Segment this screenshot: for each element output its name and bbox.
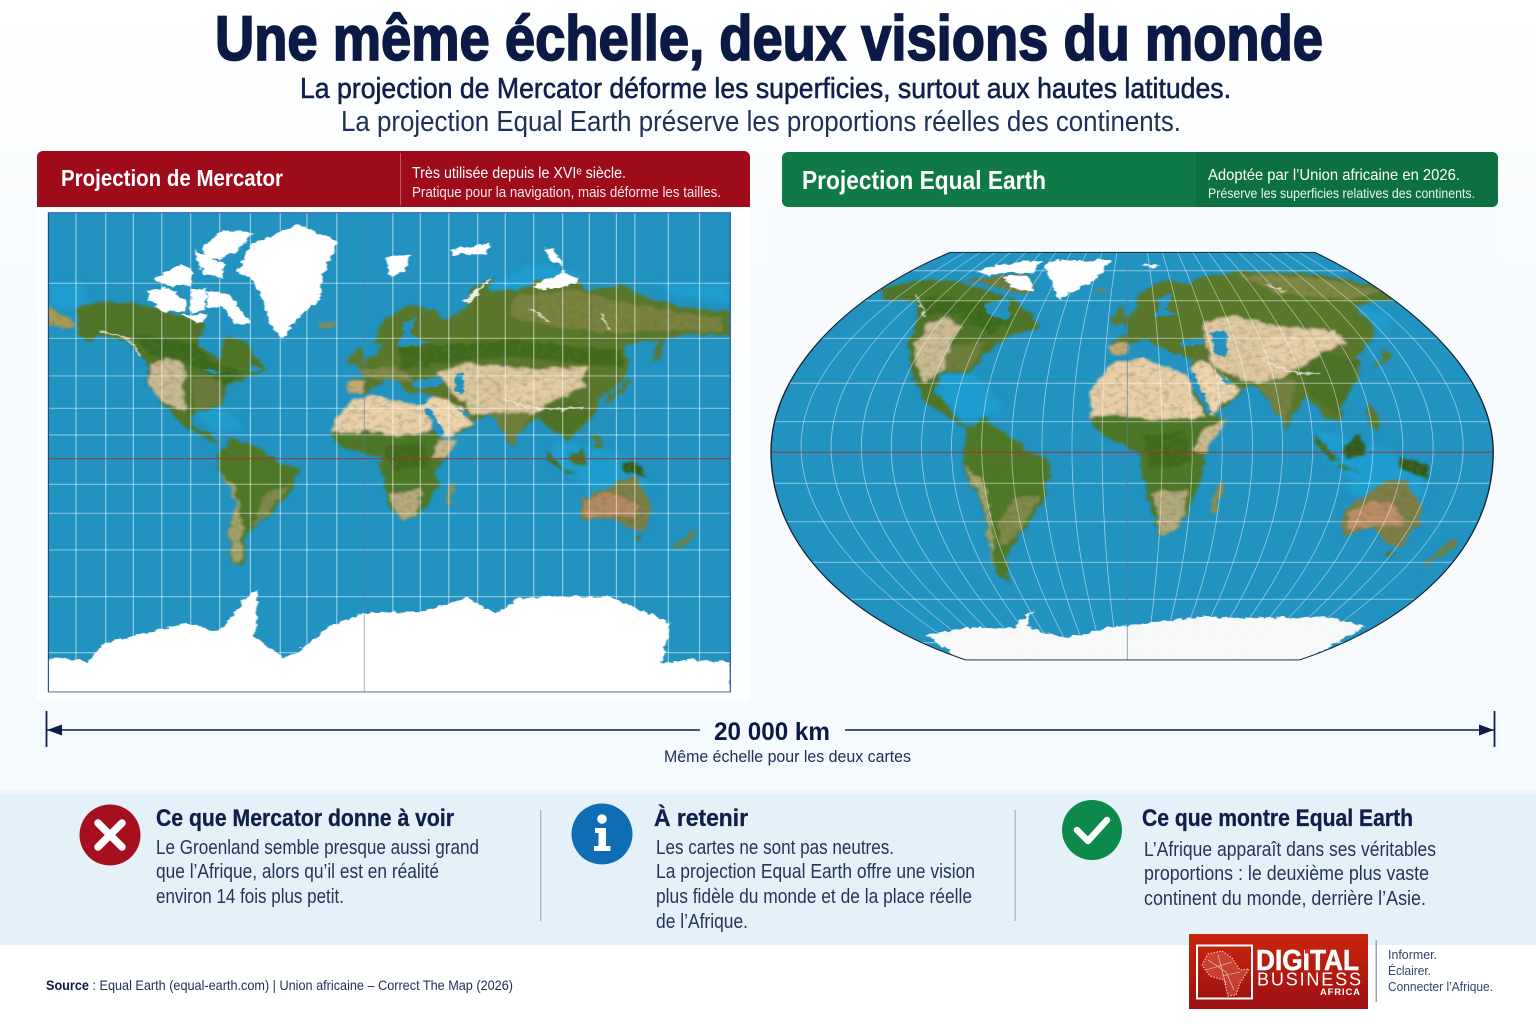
ice [925, 260, 1365, 663]
source: Source : Equal Earth (equal-earth.com) | Union africaine – Correct The Map (2026) [46, 977, 513, 993]
map: Equal Earth [760, 247, 1506, 667]
islands [1344, 432, 1365, 458]
takeaway: à retenir: La projection Equal Earth offre une vision [656, 861, 975, 883]
takeaway: Equal Earth: continent du monde, derrière l’Asie. [1144, 888, 1426, 910]
Australia [1341, 480, 1425, 547]
inland seas [198, 317, 471, 435]
header: Equal Earth: Projection Equal Earth [802, 165, 1046, 195]
panel: Mercator [37, 151, 750, 700]
takeaway: Equal Earth: Ce que montre Equal Earth [1142, 805, 1413, 832]
subtitle: La projection Equal Earth préserve les proportions réelles des continents. [341, 106, 1181, 138]
takeaway: Mercator: que l’Afrique, alors qu’il est en réalité [156, 861, 439, 883]
scale bar: Même échelle pour les deux cartes [664, 747, 911, 766]
inland seas [985, 293, 1234, 413]
title: Une même échelle, deux visions du monde [215, 4, 1323, 74]
header: Mercator: Projection de Mercator [61, 165, 283, 191]
ice: Greenland, Arctic, Antarctica [44, 225, 730, 697]
header: Equal Earth [782, 152, 1498, 207]
tagline: Éclairer. [1388, 963, 1431, 978]
North America [78, 302, 269, 445]
footer band [0, 945, 1536, 1024]
logo: Digital Business Africa: DIGITAL [1256, 945, 1359, 977]
graticule [760, 252, 1506, 660]
logo: Digital Business Africa: AFRICA [1320, 987, 1360, 998]
takeaway: Mercator [80, 804, 479, 908]
tagline: Informer. [1388, 947, 1437, 962]
icon: green check [1062, 800, 1122, 860]
tagline: Connecter l’Afrique. [1388, 979, 1493, 994]
header: Equal Earth: Préserve les superficies relatives des continents. [1208, 185, 1475, 201]
panel: takeaways band [0, 790, 1536, 945]
panel: Equal Earth [760, 152, 1506, 700]
takeaway: Mercator: environ 14 fois plus petit. [156, 886, 344, 908]
Africa [333, 395, 459, 522]
South America [218, 440, 299, 564]
North America [880, 280, 1035, 430]
takeaway: Mercator: Ce que Mercator donne à voir [156, 805, 454, 832]
arrow: 20 000 km span [46, 711, 1494, 747]
Australia [581, 477, 652, 530]
header: Mercator [37, 151, 750, 207]
takeaway: Mercator: Le Groenland semble presque aussi grand [156, 837, 479, 859]
Arabia [1190, 358, 1241, 415]
header: Mercator: Très utilisée depuis le XVIᵉ siècle. [412, 165, 626, 182]
header: Mercator: Pratique pour la navigation, mais déforme les tailles. [412, 184, 721, 201]
South America [963, 418, 1052, 585]
icon: red cross [80, 804, 140, 866]
takeaway: à retenir: plus fidèle du monde et de la place réelle [656, 886, 972, 908]
land [880, 272, 1458, 585]
snow on mountains [915, 285, 1320, 374]
takeaway: Equal Earth: proportions : le deuxième plus vaste [1144, 863, 1429, 885]
takeaway: Equal Earth: L’Afrique apparaît dans ses véritables [1144, 839, 1436, 861]
land [48, 277, 730, 564]
takeaway: à retenir [572, 804, 975, 933]
shallow seas [48, 263, 730, 500]
Africa [1090, 357, 1226, 537]
subtitle: La projection de Mercator déforme les superficies, surtout aux hautes latitudes. [300, 73, 1231, 105]
Arabia [424, 404, 475, 426]
Eurasia [1112, 272, 1401, 430]
takeaway: Equal Earth [1062, 800, 1436, 910]
Eurasia [347, 277, 730, 447]
scale bar [46, 711, 1494, 766]
icon: Africa mesh [1202, 951, 1249, 996]
shallow seas [937, 303, 1430, 497]
takeaway: à retenir: À retenir [654, 804, 748, 832]
map: Mercator [44, 213, 730, 697]
takeaway: à retenir: Les cartes ne sont pas neutres. [656, 837, 894, 859]
islands [570, 448, 588, 467]
header: Equal Earth: Adoptée par l’Union africaine en 2026. [1208, 167, 1460, 184]
logo: Digital Business Africa [1189, 934, 1368, 1009]
tagline [1388, 947, 1493, 994]
graticule [48, 213, 730, 692]
logo: Digital Business Africa: BUSINESS [1257, 970, 1361, 990]
takeaway: à retenir: de l’Afrique. [656, 911, 748, 933]
scale bar: 20 000 km [714, 718, 830, 746]
icon: information [572, 804, 632, 864]
subtitle [300, 73, 1231, 138]
snow on mountains [99, 308, 609, 410]
